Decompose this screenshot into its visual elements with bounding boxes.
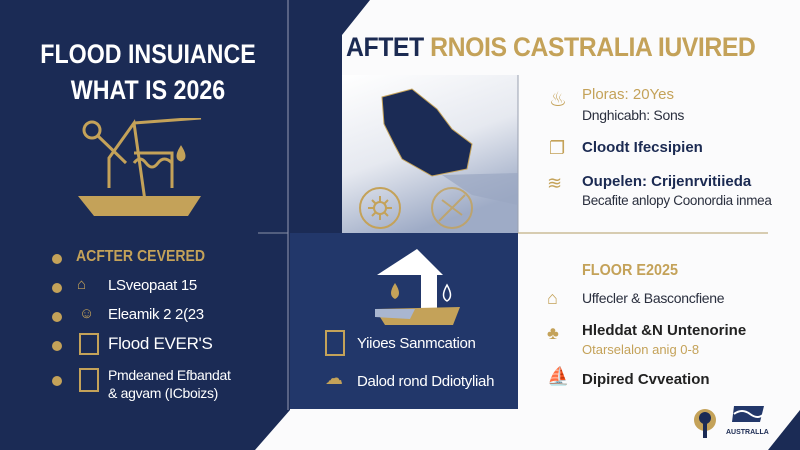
list: right top: Oupelen: Crijenrvitiieda <box>582 173 751 190</box>
item 1 <box>549 86 684 123</box>
list: left bullets: Eleamik 2 2(23 <box>108 306 204 323</box>
logos <box>694 406 769 438</box>
list: right bottom: ⛵ <box>547 366 569 386</box>
list: right bottom <box>547 262 746 388</box>
item 2 <box>549 138 703 158</box>
map: australia <box>359 88 518 229</box>
panel: bottom navy items: Dalod rond Ddiotyliah <box>357 373 494 390</box>
list: right bottom: ⌂ <box>547 288 558 308</box>
list: left bullets: Pmdeaned Efbandat <box>108 367 231 383</box>
list: right bottom: Otarselalon anig 0-8 <box>582 342 699 357</box>
panel: bottom navy items: Yiioes Sanmcation <box>357 335 476 352</box>
list: right top: Dnghicabh: Sons <box>582 107 684 123</box>
panel: bottom navy items <box>325 249 494 390</box>
title: left <box>40 39 256 105</box>
title: right: AFTET RNOIS CASTRALIA IUVIRED <box>346 32 755 62</box>
list: left bullets <box>52 248 231 401</box>
logos: AUSTRALLA <box>726 429 769 436</box>
heading: FLOOR E2025 <box>582 262 678 279</box>
logo: sun emblem <box>694 409 716 438</box>
item: Dalod <box>325 368 494 390</box>
icon: crossed circle <box>432 188 472 228</box>
list: left bullets: ACFTER CEVERED <box>76 248 205 265</box>
list: right top: Cloodt Ifecsipien <box>582 139 703 156</box>
list: right top: Ploras: 20Yes <box>582 86 674 103</box>
list: right top: ≋ <box>547 173 562 193</box>
item: Yiioes <box>325 330 476 356</box>
list: left bullets: ☺ <box>79 305 94 322</box>
item 2 <box>547 322 746 357</box>
list: left bullets: Flood EVER'S <box>108 334 213 353</box>
list: left bullets: & agvam (ICboizs) <box>108 385 218 401</box>
list: right top: Becafite anlopy Coonordia inmea <box>582 193 772 208</box>
list: left bullets: ⌂ <box>77 276 86 293</box>
list: right bottom: Hleddat &N Untenorine <box>582 322 746 339</box>
item 3 <box>547 366 710 388</box>
list: right bottom: Uffecler & Basconcfiene <box>582 290 724 306</box>
list: left bullets: LSveopaat 15 <box>108 277 197 294</box>
list: right top <box>547 86 772 208</box>
bullet item 1 <box>52 248 205 265</box>
title: left: FLOOD INSUIANCE <box>40 39 256 69</box>
panel: bottom navy items: ☁ <box>325 368 343 388</box>
list: right bottom: Dipired Cvveation <box>582 371 710 388</box>
logo: australia <box>732 406 764 422</box>
list: right top: ♨ <box>549 89 567 111</box>
icon: boat crane <box>78 118 202 216</box>
list: right top: ❐ <box>549 138 565 158</box>
icon: sun circle <box>360 188 400 228</box>
bullet item 2 <box>52 276 197 294</box>
item 1 <box>547 288 724 308</box>
list: right bottom: ♣ <box>547 323 559 343</box>
bullet item 5 <box>52 367 231 401</box>
bullet item 4 <box>52 333 213 355</box>
title: left: WHAT IS 2026 <box>71 75 225 105</box>
icon: house with drops <box>375 249 460 325</box>
bullet item 3 <box>52 305 204 323</box>
item 3 <box>547 173 772 208</box>
